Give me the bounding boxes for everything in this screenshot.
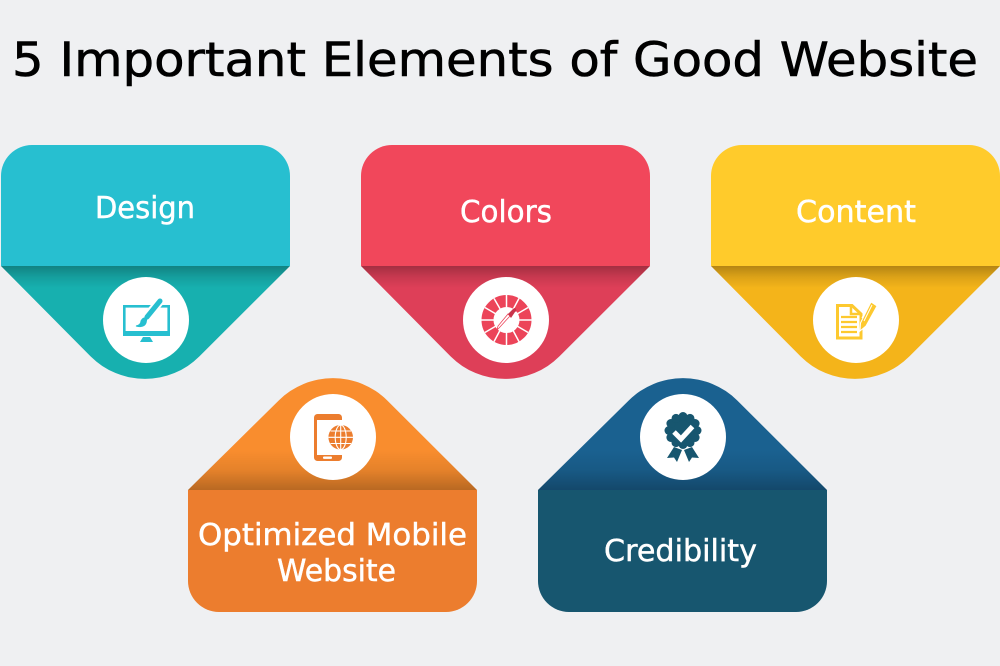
icon: phone with globe <box>290 394 376 480</box>
panel: colors <box>361 145 650 379</box>
panel: design <box>1 145 290 379</box>
panel: optimized mobile website: Website <box>277 554 396 589</box>
title: 5 Important Elements of Good Website <box>12 33 978 88</box>
label: design: Design <box>95 191 195 226</box>
icon: award badge with check <box>640 394 726 480</box>
panel: credibility <box>538 378 827 612</box>
label: optimized mobile website: Optimized Mobile <box>198 518 467 553</box>
panel: content <box>711 145 1000 379</box>
icon: monitor with paintbrush <box>103 277 189 363</box>
panel: optimized mobile website <box>188 378 477 612</box>
label: credibility: Credibility <box>604 534 757 569</box>
label: colors: Colors <box>460 195 552 230</box>
label: content: Content <box>796 195 916 230</box>
icon: colour wheel with dropper <box>463 277 549 363</box>
icon: document with pencil <box>813 277 899 363</box>
